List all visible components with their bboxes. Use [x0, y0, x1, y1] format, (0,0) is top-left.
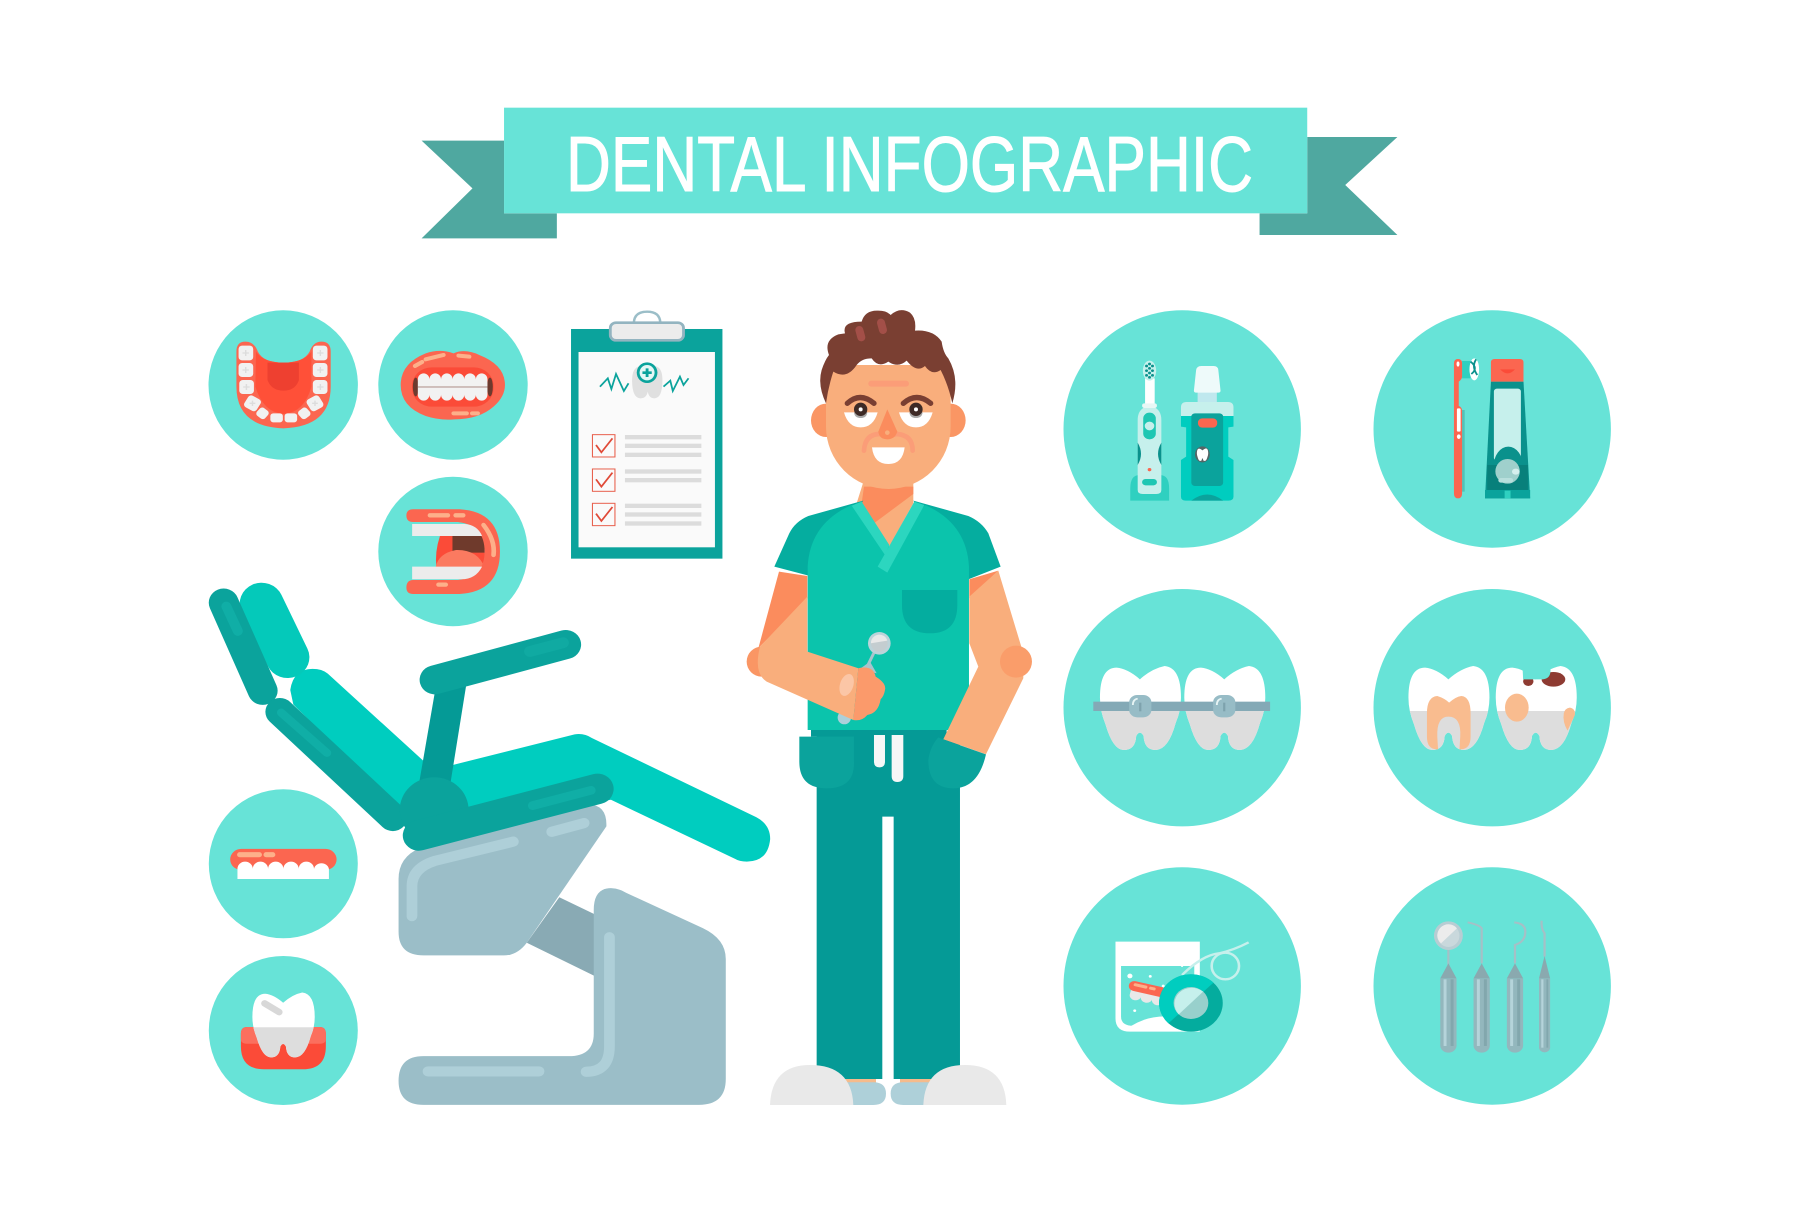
panel: braces — [1064, 589, 1301, 826]
icon: sickle probe — [1468, 922, 1490, 1053]
face — [844, 381, 933, 464]
panel: open mouth side icon — [378, 477, 528, 626]
icon: thin scaler — [1539, 921, 1550, 1052]
panel: denture glass and floss — [1064, 867, 1301, 1105]
icon: manual toothbrush — [1454, 358, 1479, 498]
icon: mouthwash bottle — [1181, 366, 1233, 501]
right arm — [943, 571, 1032, 754]
title: DENTAL INFOGRAPHIC — [566, 120, 1253, 208]
head — [826, 365, 951, 489]
legs and trousers — [770, 730, 1006, 1105]
panel: tooth in gum icon — [209, 956, 358, 1105]
panel: electric toothbrush and mouthwash — [1064, 310, 1301, 548]
panel: tooth decay — [1374, 589, 1611, 826]
chair base — [399, 805, 726, 1105]
ears — [811, 404, 966, 437]
hair — [820, 310, 955, 403]
icon: teeth with braces — [1093, 666, 1270, 750]
left arm — [747, 572, 858, 720]
icon: hook probe — [1507, 922, 1525, 1053]
chair armrest — [400, 643, 598, 843]
icon: electric toothbrush — [1130, 361, 1169, 501]
icon: glass with denture — [1115, 942, 1200, 1032]
dentist character — [747, 310, 1032, 1105]
hand — [837, 668, 885, 720]
icon: dental floss spool — [1159, 942, 1249, 1032]
icon: toothpaste tube — [1485, 359, 1530, 498]
panel: clipboard — [571, 312, 722, 559]
dental mirror instrument — [838, 632, 891, 724]
icon: mouth mirror — [1434, 921, 1463, 1053]
panel: toothbrush and toothpaste — [1374, 310, 1611, 548]
right hand in pocket — [928, 737, 986, 788]
neck — [857, 480, 913, 547]
icon: decayed tooth — [1496, 663, 1577, 750]
panel: front mouth icon — [378, 310, 528, 460]
chair seat and backrest — [224, 603, 770, 862]
scrub top — [774, 501, 1001, 730]
icon: tooth cross-section — [1408, 666, 1489, 750]
panel: upper teeth icon — [209, 789, 358, 938]
dental chair — [224, 603, 770, 1105]
panel: dental instruments — [1374, 867, 1611, 1105]
title banner — [422, 108, 1397, 238]
panel: lower jaw icon — [209, 310, 358, 460]
